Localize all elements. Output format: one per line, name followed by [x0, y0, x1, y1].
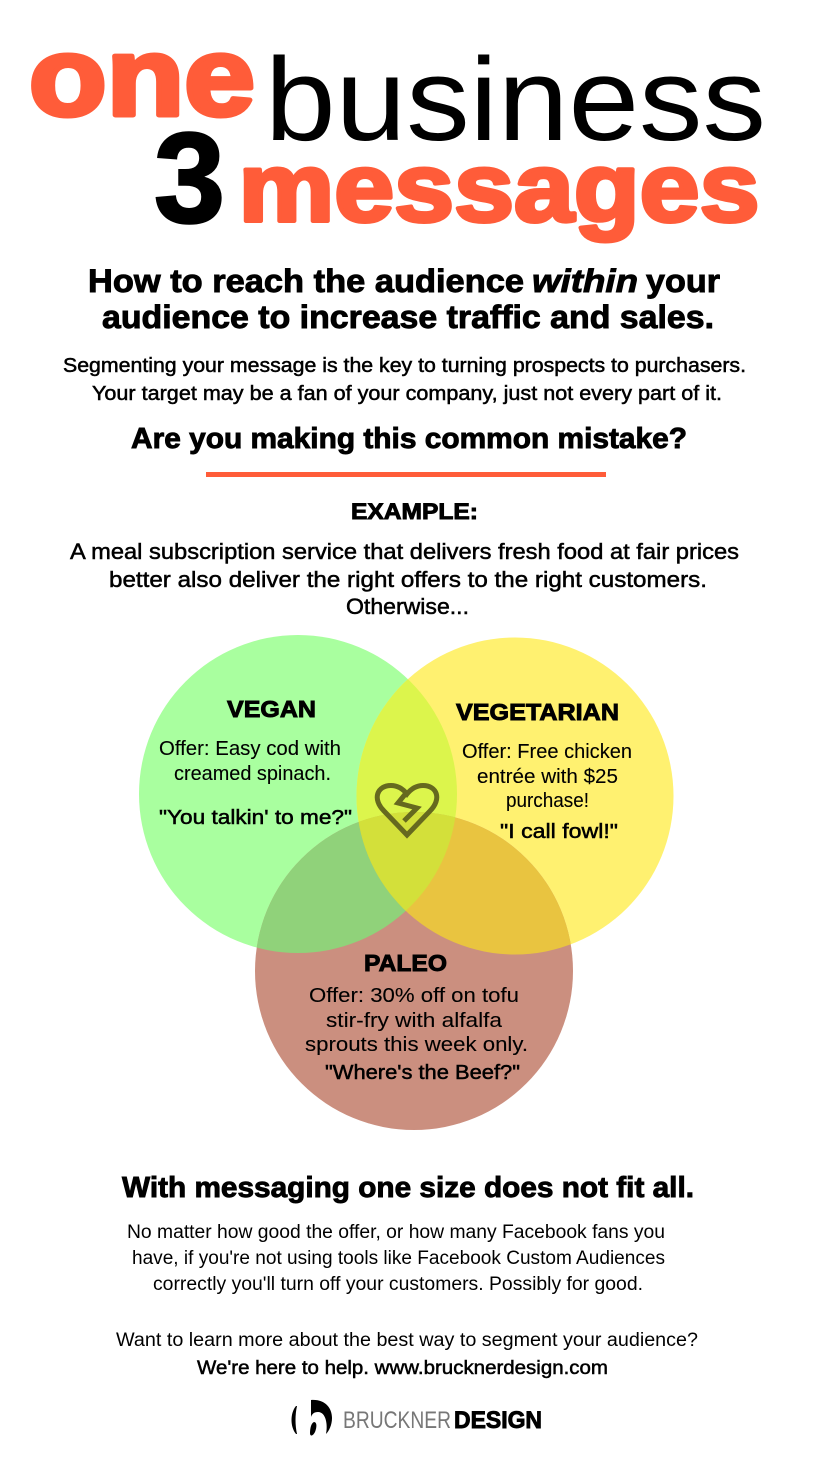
vegan text: creamed spinach. [174, 763, 331, 785]
subtitle: How to reach the audience [88, 263, 524, 299]
intro text: Your target may be a fan of your company, just not every part of it. [92, 383, 722, 405]
example text: A meal subscription service that delivers fresh food at fair prices [70, 539, 739, 564]
venn diagram [139, 635, 674, 1130]
intro text: Segmenting your message is the key to turning prospects to purchasers. [63, 355, 746, 377]
circle: vegetarian [356, 638, 674, 954]
vegetarian text: "I call fowl!" [500, 821, 618, 843]
example text: better also deliver the right offers to the right customers. [109, 567, 707, 592]
subtitle: within [532, 263, 638, 299]
heading: one size: With messaging one size does not fit all. [122, 1172, 694, 1204]
title: business [265, 34, 766, 166]
call to action: We're here to help. www.brucknerdesign.com [197, 1358, 608, 1379]
vegetarian text: purchase! [506, 790, 589, 812]
example label: EXAMPLE: [351, 499, 478, 524]
vegetarian text: entrée with $25 [477, 766, 618, 788]
title [29, 15, 766, 250]
overlap: vegan and vegetarian [356, 679, 457, 822]
vegetarian text: VEGETARIAN [456, 699, 619, 725]
subtitle [88, 263, 720, 335]
circle: paleo [255, 812, 573, 1130]
paleo text: PALEO [364, 950, 447, 976]
icon: broken heart [377, 786, 437, 835]
closing text: correctly you'll turn off your customers. Possibly for good. [153, 1274, 643, 1295]
vegetarian text [456, 699, 632, 843]
vegan text: "You talkin' to me?" [159, 807, 352, 829]
closing text: have, if you're not using tools like Facebook Custom Audiences [132, 1248, 665, 1269]
overlap: all three [358, 812, 456, 911]
example text: Otherwise... [346, 594, 469, 619]
logo [292, 1400, 542, 1436]
circle: vegan [139, 635, 457, 953]
subtitle: your [646, 263, 720, 299]
paleo text: Offer: 30% off on tofu [309, 985, 519, 1007]
title: messages [238, 133, 760, 242]
vegan text: VEGAN [227, 696, 316, 722]
call to action: Want to learn more about the best way to segment your audience? [116, 1330, 698, 1351]
paleo text [305, 950, 528, 1084]
logo: DESIGN [454, 1407, 542, 1434]
title: 3 [154, 107, 225, 250]
intro text [63, 355, 746, 405]
logo wordmark: BRUCKNER [343, 1407, 451, 1434]
example text [70, 539, 739, 619]
subtitle: audience to increase traffic and sales. [102, 299, 714, 335]
closing text: No matter how good the offer, or how many Facebook fans you [127, 1222, 665, 1243]
vegetarian text: Offer: Free chicken [462, 741, 632, 763]
overlap: vegetarian and paleo [358, 812, 571, 954]
overlap: vegan and paleo [256, 812, 455, 953]
paleo text: stir-fry with alfalfa [326, 1010, 503, 1032]
title: one [29, 15, 255, 139]
call to action [116, 1330, 698, 1379]
logo mark [292, 1400, 332, 1436]
heading: common mistake: Are you making this common mistake? [131, 423, 687, 455]
closing text [127, 1222, 665, 1295]
vegan text: Offer: Easy cod with [159, 738, 341, 760]
paleo text: "Where's the Beef?" [325, 1062, 520, 1084]
paleo text: sprouts this week only. [305, 1034, 528, 1056]
vegan text [159, 696, 352, 829]
